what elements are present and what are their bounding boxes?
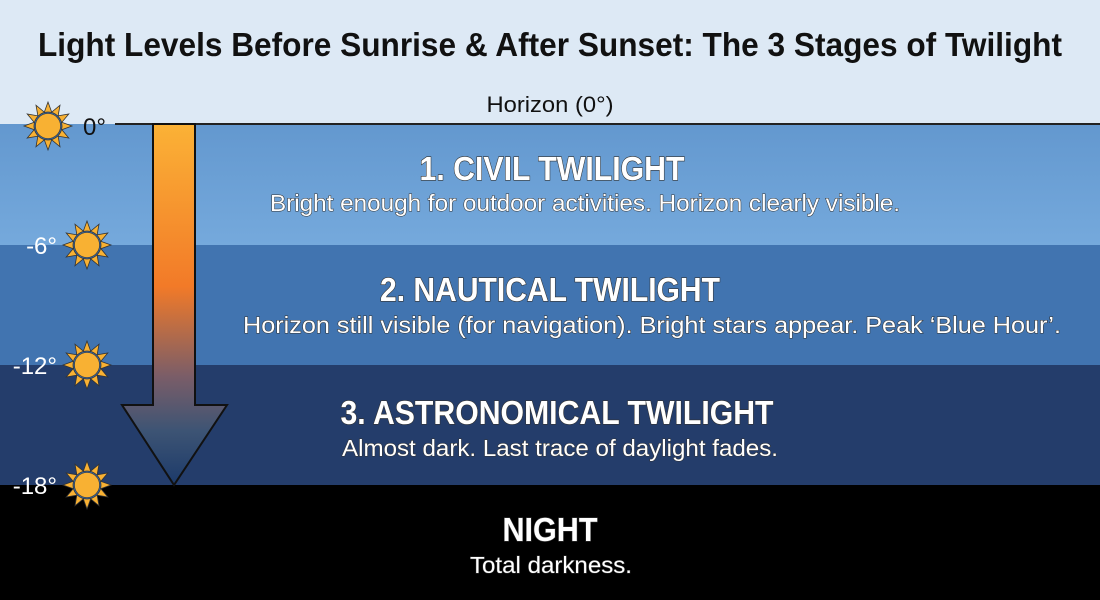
horizon line xyxy=(115,123,1100,125)
text: civil twilight xyxy=(270,150,900,216)
text: civil twilight: Bright enough for outdoor activities. Horizon clearly visible. xyxy=(270,190,900,216)
sun: -18 degrees xyxy=(13,461,111,509)
title: Light Levels Before Sunrise & After Sunset: The 3 Stages of Twilight xyxy=(38,26,1062,63)
text: nautical twilight: Horizon still visible (for navigation). Bright stars appear. Peak ‘Blue Hour’. xyxy=(243,312,1061,338)
text: nautical twilight: 2. NAUTICAL TWILIGHT xyxy=(380,271,720,308)
sun: -12 degrees: -12° xyxy=(13,353,57,380)
band: astronomical twilight xyxy=(0,365,1100,485)
sun: -18 degrees: -18° xyxy=(13,473,57,500)
sun: -6 degrees: -6° xyxy=(26,233,57,260)
text: nautical twilight xyxy=(243,271,1061,338)
band: night xyxy=(0,485,1100,600)
band: civil twilight xyxy=(0,124,1100,245)
sun: 0 degrees xyxy=(24,102,106,150)
sun: -12 degrees xyxy=(13,341,111,389)
text: night xyxy=(470,511,632,578)
band: nautical twilight xyxy=(0,245,1100,365)
sun: 0 degrees: 0° xyxy=(83,114,106,141)
sun: -6 degrees xyxy=(26,221,111,269)
horizon label: Horizon (0°) xyxy=(486,92,614,117)
arrow: descending sun xyxy=(122,124,227,485)
text: astronomical twilight: 3. ASTRONOMICAL TWILIGHT xyxy=(340,394,774,431)
text: astronomical twilight xyxy=(340,394,778,461)
text: night: NIGHT xyxy=(502,511,598,548)
text: night: Total darkness. xyxy=(470,552,632,578)
text: astronomical twilight: Almost dark. Last trace of daylight fades. xyxy=(342,435,778,461)
text: civil twilight: 1. CIVIL TWILIGHT xyxy=(420,150,684,187)
